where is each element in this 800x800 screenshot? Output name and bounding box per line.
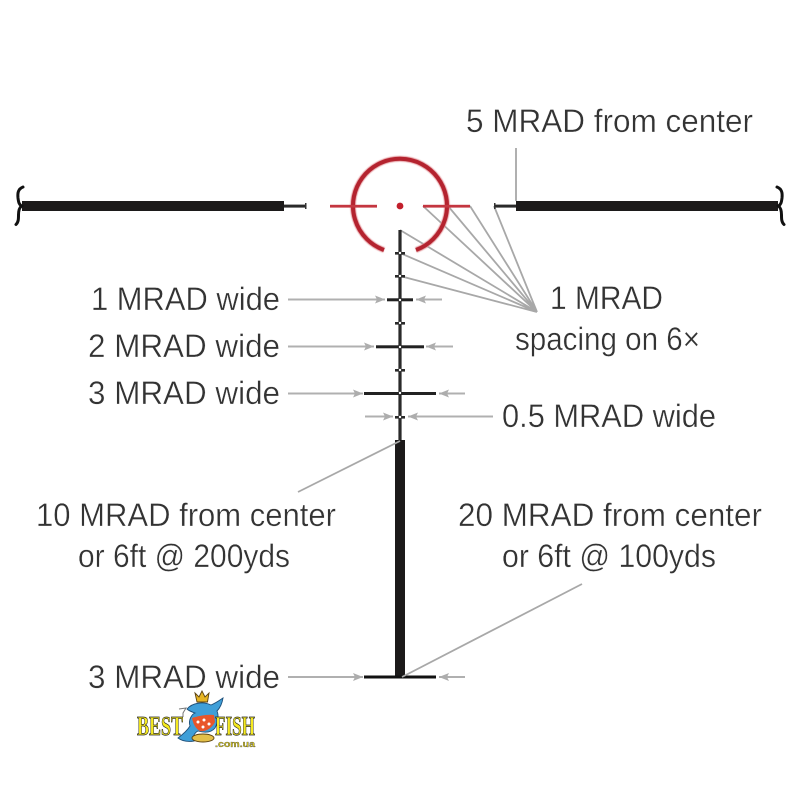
horizontal post: right — [494, 187, 784, 224]
icon: feet — [192, 734, 214, 742]
logo text: FISH: FISH — [215, 711, 255, 741]
icon: crown — [195, 691, 209, 702]
label: 0.5 MRAD wide: 0.5 MRAD wide — [502, 398, 716, 434]
vertical post with hash marks — [364, 230, 436, 678]
label: 10 MRAD from center: 10 MRAD from center — [36, 497, 336, 533]
width arrows — [288, 300, 493, 677]
red center ring and crosshair — [330, 159, 470, 250]
leader line: 20 MRAD — [402, 584, 582, 677]
label: 3 MRAD wide: 3 MRAD wide — [88, 375, 280, 411]
horizontal post: left — [16, 187, 306, 224]
label: 20 MRAD from center: or 6ft @ 100yds — [502, 538, 716, 574]
logo: Best Fish — [137, 691, 256, 749]
label: 1 MRAD spacing on 6x: 1 MRAD — [550, 280, 663, 316]
label: 10 MRAD from center — [36, 497, 336, 574]
icon: shirt — [192, 715, 215, 731]
logo text: .com.ua: .com.ua — [215, 739, 256, 749]
label: 20 MRAD from center — [458, 497, 762, 574]
label: 5 MRAD from center: 5 MRAD from center — [466, 103, 753, 139]
leader lines: 1 MRAD spacing fan — [400, 206, 537, 312]
leader line: 5 MRAD — [515, 148, 517, 201]
label: 2 MRAD wide: 2 MRAD wide — [88, 328, 280, 364]
label: 10 MRAD from center: or 6ft @ 200yds — [78, 538, 290, 574]
label: 1 MRAD wide: 1 MRAD wide — [91, 281, 280, 317]
logo text: BEST: BEST — [137, 711, 183, 741]
label: 1 MRAD spacing on 6x: spacing on 6× — [515, 321, 700, 357]
label: 1 MRAD spacing on 6x — [515, 280, 700, 357]
icon: fish mascot — [178, 698, 223, 742]
label: 20 MRAD from center: 20 MRAD from center — [458, 497, 762, 533]
leader line: 10 MRAD — [298, 441, 400, 492]
label: bottom 3 MRAD wide: 3 MRAD wide — [88, 659, 280, 695]
icon: glass — [179, 708, 186, 717]
